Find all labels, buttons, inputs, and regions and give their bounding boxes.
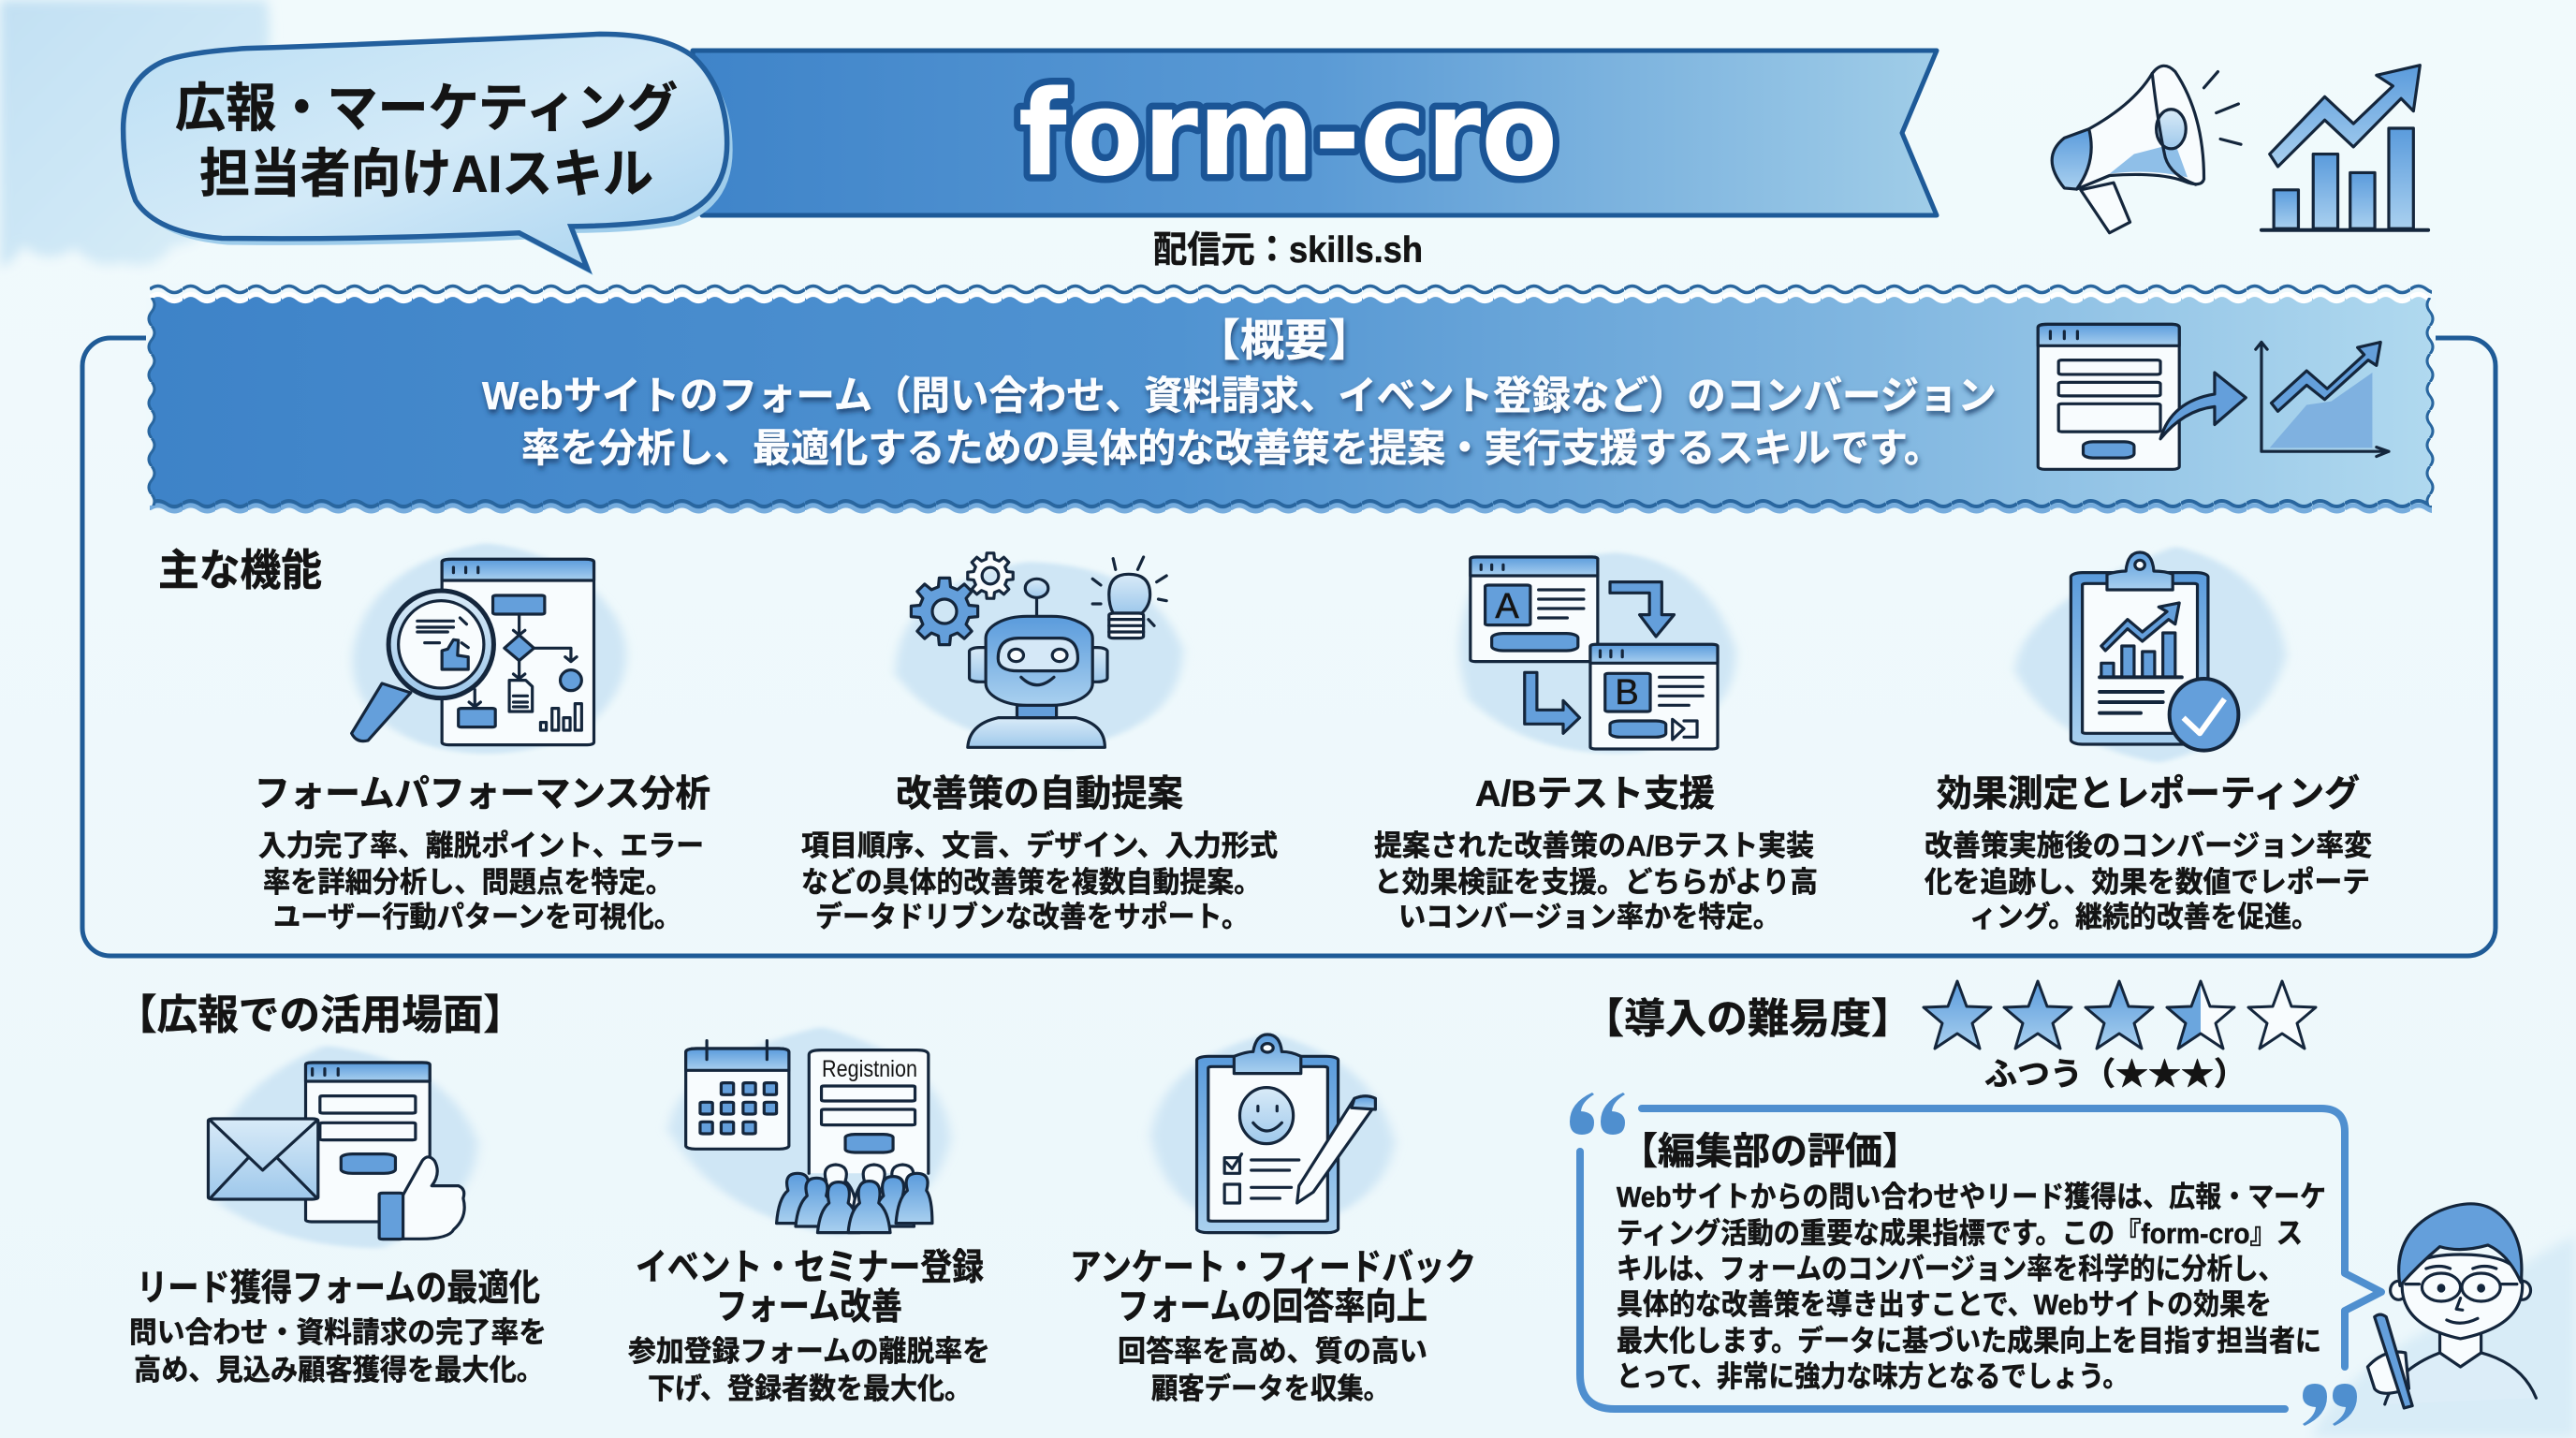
- review body: 最大化します。データに基づいた成果向上を目指す担当者に: [1617, 1325, 2321, 1357]
- overview heading: 【概要】: [1196, 315, 1372, 365]
- use case title: アンケート・フィードバック: [1070, 1248, 1476, 1288]
- review heading: 【編集部の評価】: [1620, 1131, 1920, 1172]
- review body: 具体的な改善策を導き出すことで、Webサイトの効果を: [1617, 1288, 2272, 1321]
- use case description: [129, 1316, 547, 1387]
- review body: とって、非常に強力な味方となるでしょう。: [1617, 1360, 2129, 1393]
- review body: キルは、フォームのコンバージョン率を科学的に分析し、: [1617, 1253, 2284, 1285]
- title ribbon: [693, 51, 1937, 215]
- icon: magnifier over flowchart: [352, 543, 626, 754]
- feature title: 改善策の自動提案: [896, 774, 1183, 814]
- rating label: ふつう（★★★）: [1984, 1057, 2247, 1093]
- overview text line 1: Webサイトのフォーム（問い合わせ、資料請求、イベント登録など）のコンバージョン: [482, 374, 1997, 418]
- icon: A/B windows: [1459, 552, 1735, 754]
- feature description: [258, 829, 704, 933]
- source credit: 配信元：skills.sh: [1153, 230, 1423, 271]
- use case title: [636, 1248, 984, 1328]
- overview text line 2: 率を分析し、最適化するための具体的な改善策を提案・実行支援するスキルです。: [521, 426, 1942, 470]
- use case description: 問い合わせ・資料請求の完了率を: [129, 1316, 547, 1349]
- heading: main features: 主な機能: [158, 546, 322, 594]
- feature 1: form performance analysis: [255, 543, 710, 933]
- feature 4: measurement and reporting: [1925, 546, 2372, 933]
- icon: clipboard report with check: [2015, 546, 2286, 763]
- feature description: などの具体的改善策を複数自動提案。: [801, 866, 1261, 899]
- feature description: いコンバージョン率かを特定。: [1398, 901, 1780, 933]
- use case description: 回答率を高め、質の高い: [1118, 1335, 1427, 1368]
- icon: A/B windows: B: [1615, 673, 1639, 712]
- icon: survey clipboard with pencil: [1151, 1033, 1395, 1238]
- feature title: 効果測定とレポーティング: [1937, 774, 2360, 814]
- icon: envelope, form and thumbs up: [208, 1046, 477, 1248]
- badge text line 1: 広報・マーケティング: [175, 79, 678, 138]
- feature title: フォームパフォーマンス分析: [255, 774, 710, 814]
- star rating: [1924, 981, 2316, 1049]
- feature description: 改善策実施後のコンバージョン率変: [1925, 829, 2372, 862]
- icon: megaphone: [2052, 66, 2241, 233]
- use case title: フォーム改善: [716, 1287, 902, 1328]
- feature description: 率を詳細分析し、問題点を特定。: [263, 866, 673, 899]
- icon: robot with gears and bulb: [896, 553, 1183, 749]
- watercolor wash: bottom right: [2312, 1236, 2576, 1438]
- icon: opening quote: [1570, 1093, 1625, 1135]
- use case title: リード獲得フォームの最適化: [137, 1269, 540, 1309]
- feature description: [1374, 829, 1818, 933]
- badge text line 2: 担当者向けAIスキル: [199, 144, 653, 203]
- use case title: イベント・セミナー登録: [636, 1248, 984, 1288]
- title: form-cro: form-cro: [1018, 65, 1558, 202]
- feature description: データドリブンな改善をサポート。: [815, 901, 1249, 933]
- review body: ティング活動の重要な成果指標です。この『form-cro』ス: [1617, 1217, 2303, 1250]
- use case description: 下げ、登録者数を最大化。: [648, 1372, 972, 1405]
- watercolor wash: top left: [0, 0, 270, 267]
- main feature panel outline: [82, 338, 2496, 956]
- feature 2: automatic improvement suggestions: [801, 553, 1278, 933]
- feature description: ユーザー行動パターンを可視化。: [273, 901, 681, 933]
- use case description: 顧客データを収集。: [1151, 1372, 1390, 1405]
- feature description: 入力完了率、離脱ポイント、エラー: [258, 829, 704, 862]
- feature description: 化を追跡し、効果を数値でレポーテ: [1925, 866, 2370, 899]
- icon: growth bar chart: [2261, 66, 2428, 230]
- use case 1: lead form: [129, 1046, 547, 1387]
- icon: form to chart: [2038, 324, 2389, 469]
- use case description: [1118, 1335, 1427, 1405]
- icon: calendar, form and audience: [668, 1027, 950, 1236]
- review body: [1617, 1181, 2326, 1393]
- use case title: [1070, 1248, 1476, 1328]
- feature description: と効果検証を支援。どちらがより高: [1374, 866, 1818, 899]
- review body: Webサイトからの問い合わせやリード獲得は、広報・マーケ: [1617, 1181, 2326, 1213]
- icon: A/B windows: A: [1495, 587, 1519, 626]
- icon: closing quote: [2303, 1384, 2357, 1426]
- icon: calendar, form and audience: Registnion: [822, 1056, 917, 1082]
- use case description: 高め、見込み顧客獲得を最大化。: [134, 1354, 544, 1387]
- icon: editor character with pen: [2367, 1204, 2536, 1408]
- panel: editorial review: [1570, 1093, 2381, 1426]
- use case title: フォームの回答率向上: [1118, 1287, 1427, 1328]
- feature 3: A/B test support: [1374, 552, 1818, 933]
- panel: overview: [146, 283, 2436, 519]
- use case description: 参加登録フォームの離脱率を: [628, 1335, 990, 1368]
- heading: PR use cases: 【広報での活用場面】: [116, 992, 524, 1038]
- feature title: A/Bテスト支援: [1475, 774, 1715, 814]
- feature description: 提案された改善策のA/Bテスト実装: [1374, 829, 1814, 862]
- heading: adoption difficulty: 【導入の難易度】: [1583, 996, 1912, 1042]
- feature description: [1925, 829, 2372, 933]
- use case 2: event registration: [628, 1027, 990, 1405]
- feature description: [801, 829, 1278, 933]
- use case description: [628, 1335, 990, 1405]
- feature description: 項目順序、文言、デザイン、入力形式: [801, 829, 1278, 862]
- feature description: ィング。継続的改善を促進。: [1969, 901, 2319, 933]
- use case 3: survey feedback: [1070, 1033, 1476, 1405]
- speech bubble badge: [124, 34, 733, 275]
